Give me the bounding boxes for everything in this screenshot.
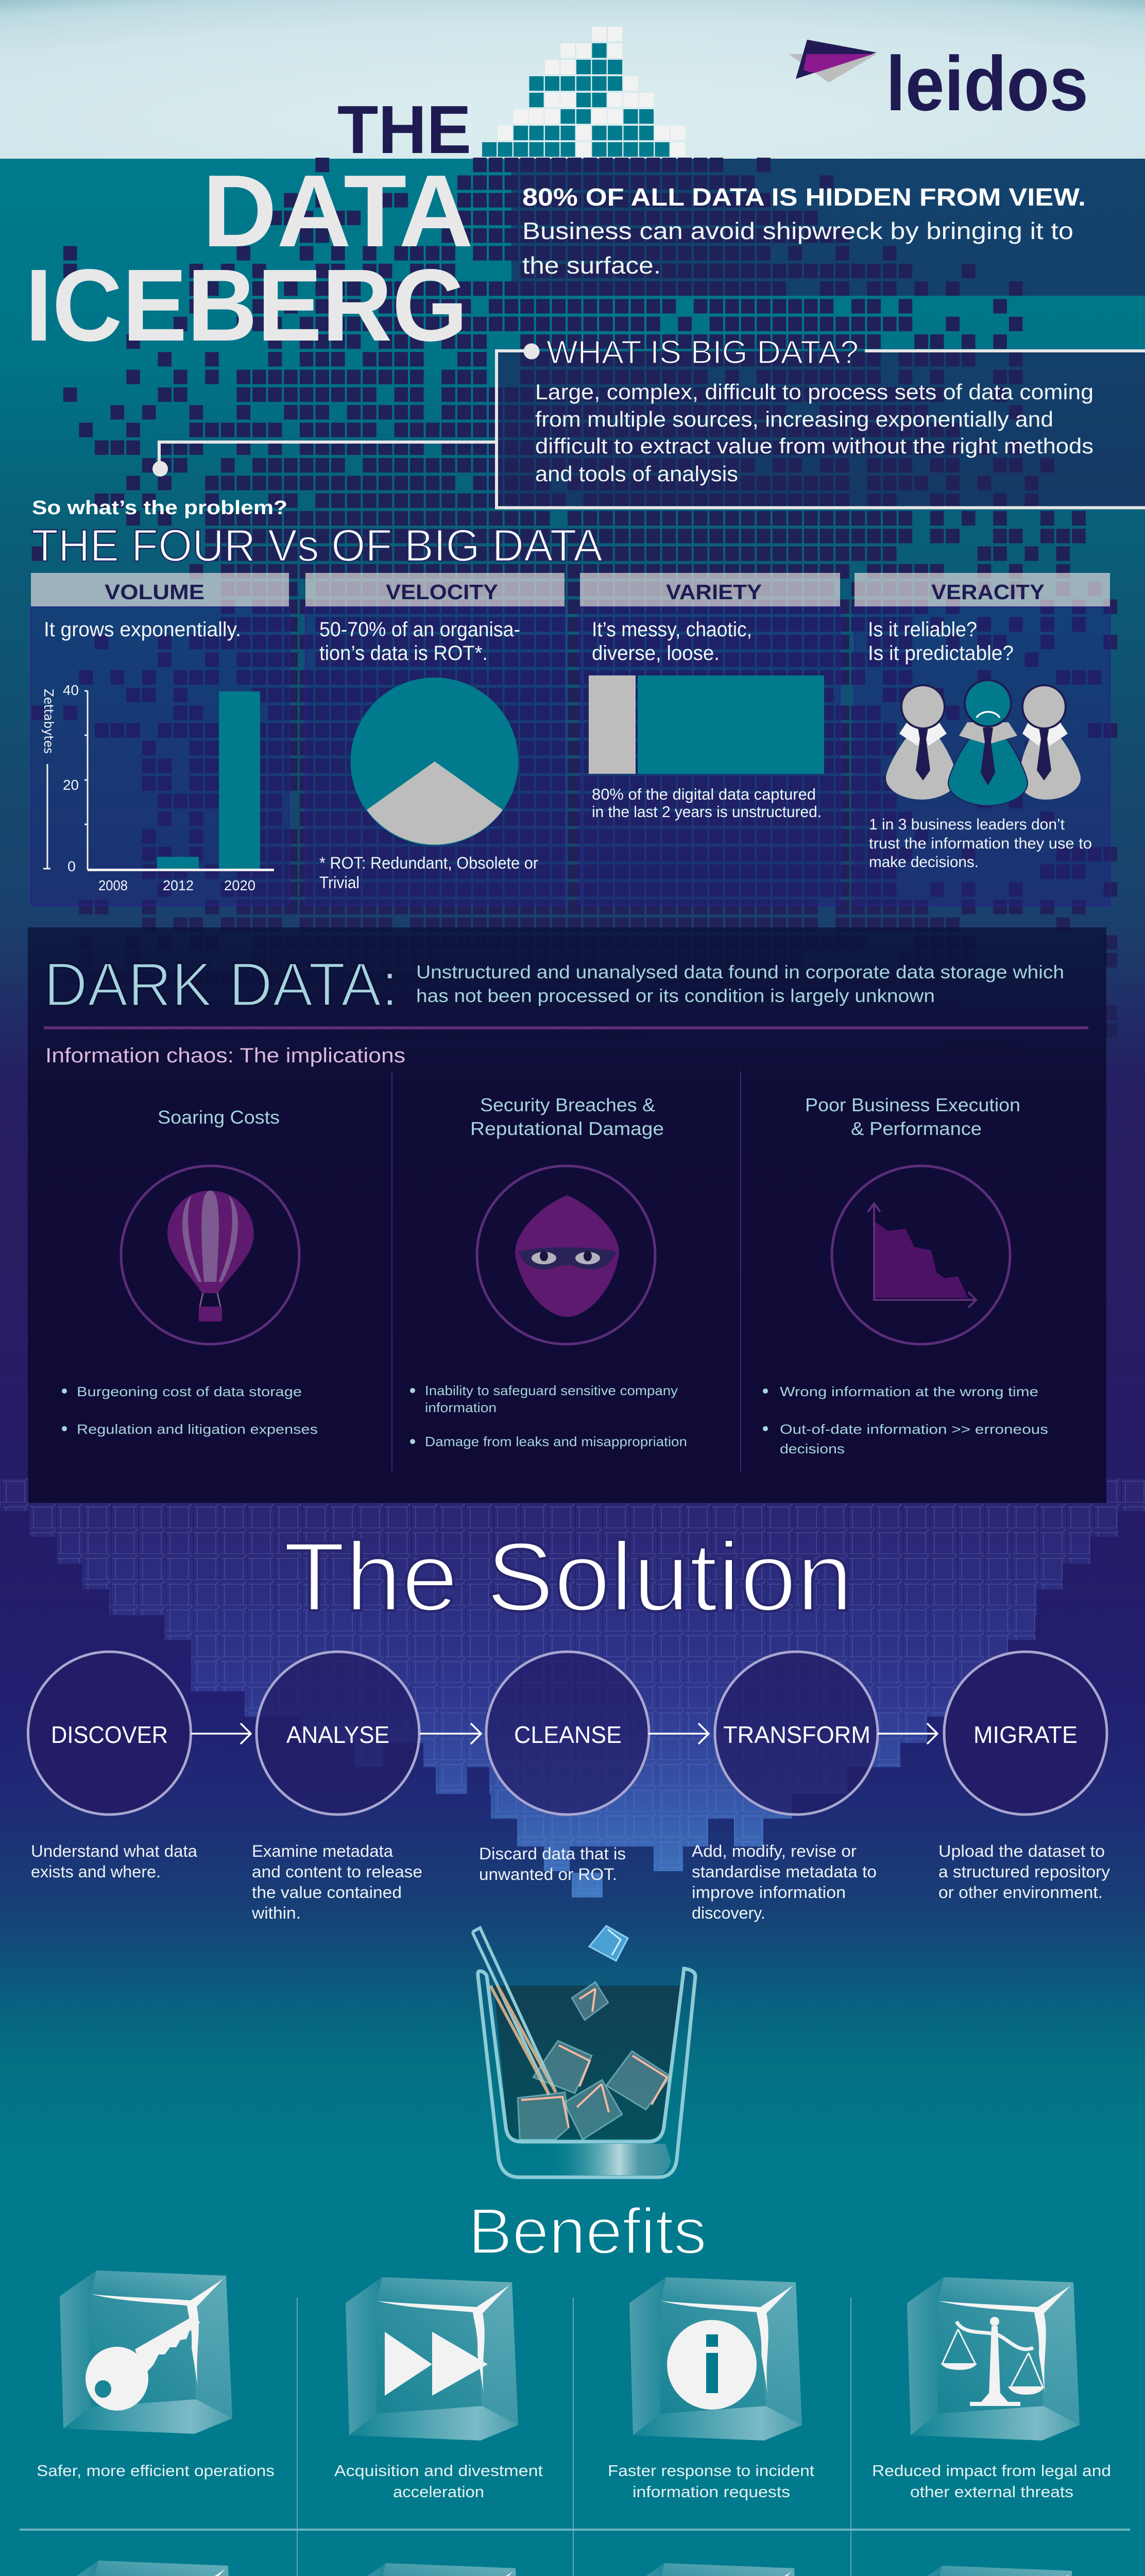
arrow: discover to analyse (191, 1723, 251, 1744)
column: poor execution (763, 1094, 1048, 1456)
process step: cleanse: CLEANSE (514, 1721, 622, 1748)
text block: analyse description: and content to release (252, 1862, 422, 1881)
text block: migrate description (938, 1842, 1110, 1902)
bar chart: zettabytes growth: 2012 (163, 877, 194, 893)
panel: veracity: Is it predictable? (868, 642, 1014, 665)
straw (472, 1928, 556, 2095)
title: THE: THE (337, 92, 471, 167)
submerged data grid mosaic (32, 158, 1119, 1059)
panel: velocity: 50-70% of an organisa- (319, 618, 520, 641)
submerged iceberg of ice cubes (0, 1479, 1145, 1897)
heading: what is big data: WHAT IS BIG DATA? (546, 334, 859, 370)
column: soaring costs (62, 1107, 318, 1437)
bar chart: zettabytes growth (41, 682, 274, 893)
text block: discover description: Understand what data (31, 1842, 197, 1860)
text block: big data definition: difficult to extract value from without the right methods (535, 434, 1093, 458)
benefit: safer operations: Safer, more efficient operations (37, 2462, 275, 2480)
text block: discover description: exists and where. (31, 1862, 161, 1881)
process step: transform: TRANSFORM (723, 1721, 870, 1748)
heading: benefits: Benefits (468, 2195, 707, 2267)
column: poor execution: decisions (780, 1441, 845, 1456)
benefit dividers (297, 2297, 851, 2576)
text block: hidden from view: Business can avoid shipwreck by bringing it to (522, 217, 1073, 244)
text block: migrate description: or other environment. (938, 1883, 1103, 1902)
column: poor execution: Out-of-date information >> erroneous (780, 1421, 1048, 1437)
logo: leidos: leidos (886, 40, 1088, 127)
panel: veracity: make decisions. (869, 854, 979, 871)
falling cube (589, 1926, 628, 1961)
text block: migrate description: Upload the dataset to (938, 1842, 1105, 1860)
benefit: faster response: information requests (633, 2483, 790, 2501)
benefit: reduced impact (872, 2277, 1111, 2501)
text block: big data definition: and tools of analysis (535, 462, 738, 486)
bar chart: zettabytes growth: 2008 (98, 877, 128, 893)
panel: what is big data background (497, 351, 1145, 507)
text block: dark data definition: Unstructured and unanalysed data found in corporate data storage which (416, 961, 1064, 982)
icon: business leaders (886, 680, 1081, 806)
bar chart: zettabytes growth: 0 (67, 858, 76, 874)
panel: velocity: tion’s data is ROT*. (319, 642, 488, 665)
title: ICEBERG: ICEBERG (25, 248, 468, 363)
text block: hidden from view: 80% OF ALL DATA IS HIDDEN FROM VIEW. (522, 184, 1086, 211)
column: security breaches: Reputational Damage (470, 1118, 664, 1139)
process step: analyse: ANALYSE (286, 1721, 389, 1748)
submerged cubes (518, 1982, 671, 2140)
stacked bar: unstructured share (589, 675, 824, 774)
panel: variety: diverse, loose. (592, 642, 720, 665)
connector lines and dots (152, 343, 1145, 508)
illustration: glass of ice cubes (472, 1926, 695, 2177)
title: DATA: DATA (202, 154, 473, 268)
icon: key (86, 2315, 200, 2411)
text block: dark data definition: has not been processed or its condition is largely unknown (416, 985, 935, 1006)
column: poor execution: Poor Business Execution (805, 1094, 1020, 1115)
text block: big data definition (535, 380, 1093, 486)
benefit: clarity and accuracy (349, 2563, 522, 2576)
column: security breaches (410, 1094, 687, 1449)
arrow: cleanse to transform (648, 1723, 709, 1744)
panel: variety: 80% of the digital data captured (592, 785, 816, 803)
pie chart: ROT share (350, 677, 518, 845)
process step: discover (28, 1652, 191, 1815)
panel: velocity: VELOCITY (386, 580, 498, 604)
text block: transform description: standardise metadata to (692, 1862, 877, 1881)
panel: velocity: Trivial (319, 873, 360, 892)
process step: discover: DISCOVER (51, 1721, 168, 1748)
text block: discover description (31, 1842, 197, 1881)
text block: analyse description: within. (251, 1904, 301, 1922)
panel: veracity (855, 573, 1110, 905)
process step: migrate: MIGRATE (973, 1721, 1078, 1748)
cube highlights (521, 1989, 667, 2128)
panel: veracity: VERACITY (931, 580, 1045, 604)
text block: hidden from view: the surface. (522, 252, 661, 279)
text block: transform description (692, 1842, 877, 1922)
column: security breaches: Damage from leaks and misappropriation (425, 1434, 687, 1449)
panel: veracity: 1 in 3 business leaders don’t (869, 816, 1065, 833)
bar chart: zettabytes growth: Zettabytes (41, 689, 56, 754)
subheading: information chaos: Information chaos: The implications (45, 1044, 405, 1067)
text block: cleanse description: Discard data that is (479, 1844, 626, 1863)
text block: big data definition: Large, complex, difficult to process sets of data coming (535, 380, 1093, 404)
benefit: market confidence (596, 2563, 829, 2576)
text block: analyse description: Examine metadata (252, 1842, 393, 1860)
bar chart: zettabytes growth: 2020 (224, 877, 255, 893)
icon: fast forward (385, 2332, 488, 2396)
benefit: reduced impact: Reduced impact from legal and (872, 2462, 1111, 2480)
text block: big data definition: from multiple sources, increasing exponentially and (535, 407, 1053, 431)
panel: veracity: trust the information they use to (869, 835, 1092, 852)
text block: hidden from view (522, 184, 1086, 279)
panel: variety: in the last 2 years is unstructured. (592, 803, 822, 821)
benefit: control over storage (57, 2561, 257, 2576)
text block: analyse description: the value contained (252, 1883, 402, 1902)
panel: veracity: Is it reliable? (868, 618, 977, 641)
icon: scales (941, 2317, 1045, 2406)
heading: the solution: The Solution (283, 1522, 853, 1632)
benefit: right information (877, 2566, 1109, 2576)
bar chart: zettabytes growth: 40 (63, 682, 79, 698)
benefit: acquisition acceleration (334, 2277, 543, 2501)
sky background (0, 0, 1145, 159)
subheading: so what's the problem: So what’s the problem? (32, 497, 287, 519)
panel: dark data (28, 927, 1106, 1503)
panel: volume: VOLUME (105, 580, 204, 604)
panel: variety: VARIETY (666, 580, 762, 604)
process step: migrate (944, 1652, 1107, 1815)
process step: transform (715, 1652, 878, 1815)
icon: hot air balloon (167, 1191, 254, 1321)
icon: declining chart (868, 1204, 976, 1308)
text block: dark data definition (416, 961, 1064, 1006)
benefit: acquisition acceleration: Acquisition and divestment (334, 2462, 543, 2480)
column: security breaches: Inability to safeguard sensitive company (425, 1383, 678, 1398)
column: security breaches: Security Breaches & (480, 1094, 655, 1115)
panel: volume (31, 573, 289, 905)
benefit: reduced impact: other external threats (910, 2483, 1073, 2501)
heading: dark data: DARK DATA: (44, 950, 398, 1019)
benefit: faster response: Faster response to incident (608, 2462, 814, 2480)
text block: transform description: improve information (692, 1883, 846, 1902)
benefit: acquisition acceleration: acceleration (393, 2483, 484, 2501)
text block: transform description: discovery. (692, 1904, 765, 1922)
benefit: safer operations (37, 2270, 275, 2480)
panel: velocity (305, 573, 565, 905)
heading: the four Vs of big data: THE FOUR Vs OF BIG DATA (31, 520, 603, 571)
icon: masked head (515, 1195, 619, 1317)
glass outline (478, 1969, 695, 2177)
benefit divider (20, 2529, 1130, 2531)
arrow: transform to migrate (878, 1723, 937, 1744)
process step: cleanse (486, 1652, 649, 1815)
arrow: analyse to cleanse (420, 1723, 481, 1744)
column: security breaches: information (425, 1400, 497, 1415)
column: soaring costs: Regulation and litigation expenses (77, 1421, 318, 1437)
icon: information (667, 2320, 757, 2410)
iceberg tip mosaic above the waterline (482, 27, 686, 159)
column: soaring costs: Burgeoning cost of data storage (77, 1384, 302, 1399)
text block: transform description: Add, modify, revise or (692, 1842, 857, 1860)
panel: hidden data intro background (511, 159, 1145, 296)
column: soaring costs: Soaring Costs (158, 1107, 280, 1128)
panel: variety (580, 573, 840, 905)
bar chart: zettabytes growth: 20 (63, 777, 79, 793)
panel: volume: It grows exponentially. (44, 618, 241, 641)
text block: cleanse description: unwanted or ROT. (479, 1865, 617, 1884)
logo: leidos (789, 40, 1088, 127)
column: poor execution: Wrong information at the wrong time (780, 1384, 1038, 1399)
text block: migrate description: a structured repository (938, 1862, 1110, 1881)
process step: analyse (257, 1652, 419, 1815)
text block: cleanse description (479, 1844, 626, 1884)
text block: analyse description (251, 1842, 422, 1922)
benefit: faster response (608, 2277, 814, 2501)
column: poor execution: & Performance (851, 1118, 982, 1139)
panel: velocity: * ROT: Redundant, Obsolete or (319, 854, 538, 872)
panel: variety: It’s messy, chaotic, (592, 618, 752, 641)
